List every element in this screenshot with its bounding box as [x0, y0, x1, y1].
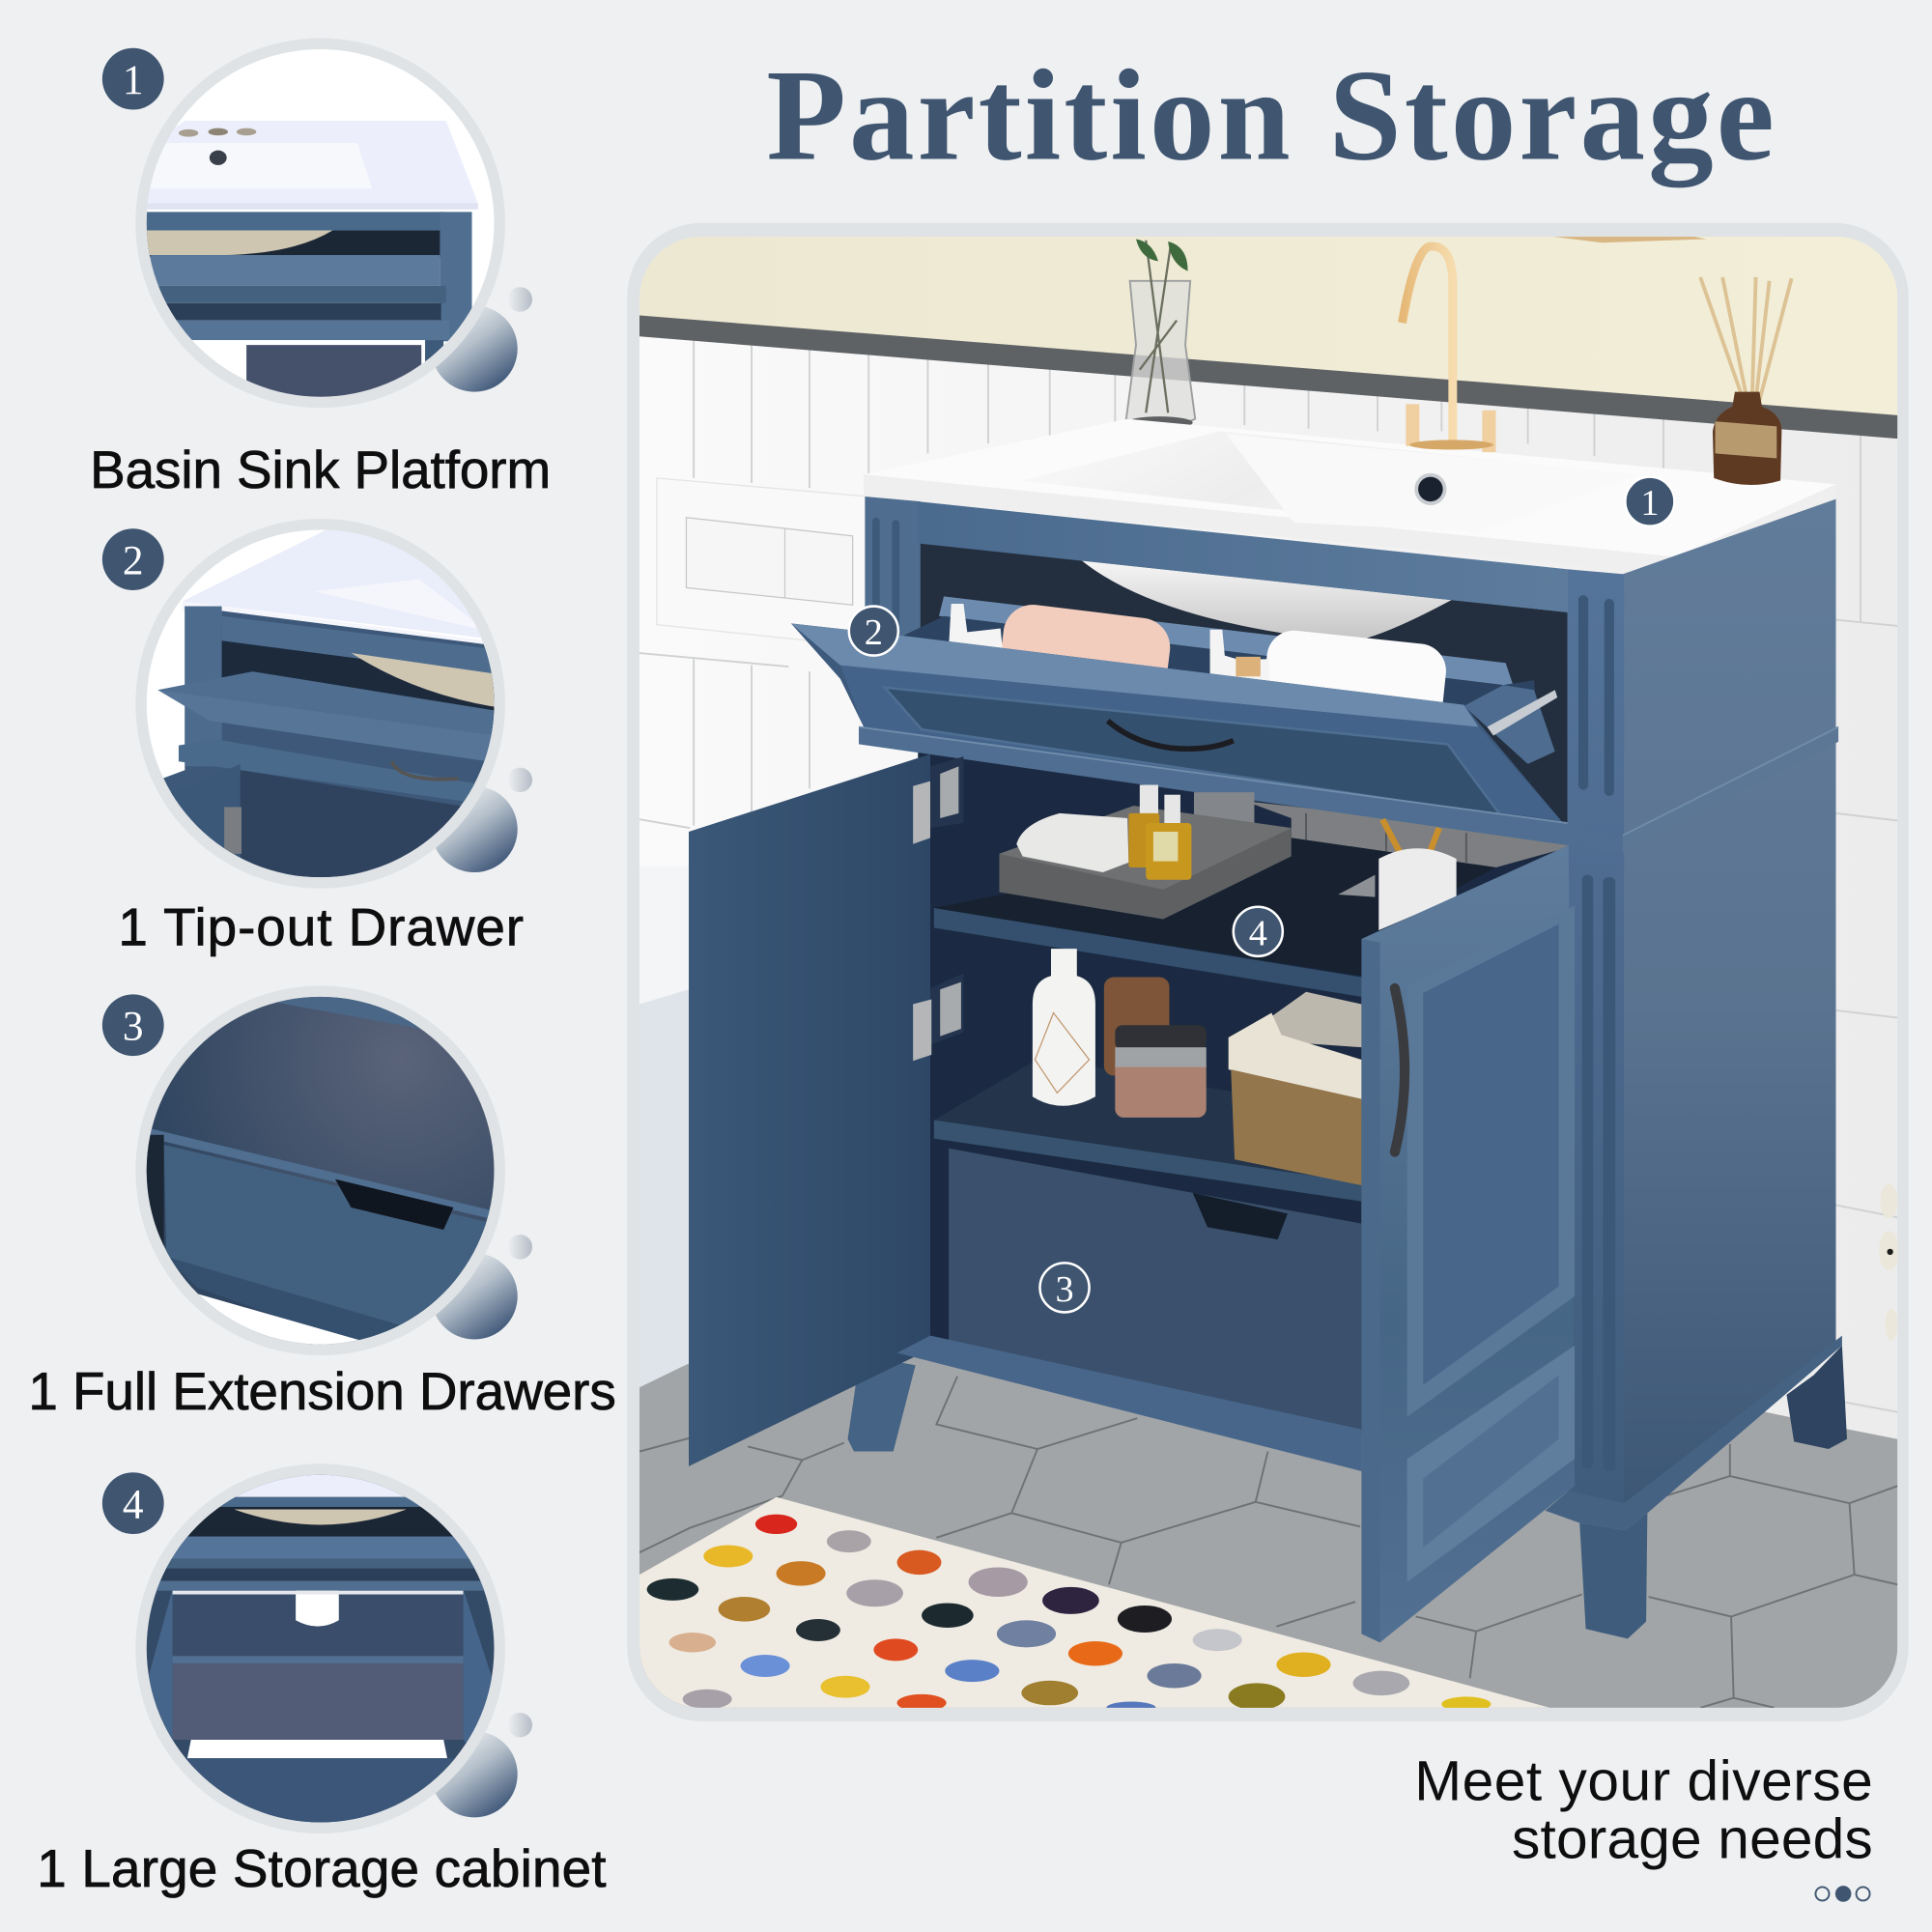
mid moulding — [859, 727, 1838, 853]
wall tiles — [639, 330, 1897, 1454]
top rail — [918, 501, 1567, 612]
drawer front — [791, 623, 1564, 842]
marker 2: 2 — [865, 612, 883, 653]
panel frame — [627, 223, 1909, 1721]
tagline: storage needs — [1512, 1807, 1873, 1870]
white bottle — [1209, 630, 1446, 702]
item 4: large storage cabinet — [37, 1463, 607, 1898]
slide rail — [1488, 690, 1557, 735]
scene artwork — [639, 237, 1899, 1714]
right back leg — [1786, 1346, 1847, 1449]
lower panel — [1407, 1346, 1575, 1582]
label: 1 Full Extension Drawers — [28, 1361, 616, 1421]
number badge: 2 — [123, 537, 144, 583]
front left leg — [848, 1355, 916, 1452]
wall trim band — [639, 316, 1897, 439]
upper shelf with items — [933, 784, 1495, 997]
marker 3: 3 — [1055, 1269, 1074, 1310]
marker 4: 4 — [1249, 913, 1267, 953]
marker 4 — [1234, 907, 1283, 956]
left door — [689, 754, 963, 1466]
brown cup — [1104, 977, 1169, 1076]
decorative bubbles — [431, 1713, 532, 1817]
drain — [1414, 473, 1446, 505]
marker 3 — [1040, 1263, 1090, 1312]
marker 1 — [1625, 477, 1674, 526]
full extension drawer — [949, 1149, 1361, 1432]
raised panel — [885, 688, 1501, 815]
tagline: Meet your diverse — [1414, 1750, 1873, 1813]
marker 1: 1 — [1640, 483, 1659, 524]
lower shelf items — [934, 949, 1361, 1202]
towels in basket — [1271, 992, 1361, 1047]
upper dark cavity — [1466, 601, 1567, 822]
top lip — [791, 623, 1479, 727]
detail circle — [135, 518, 505, 889]
front right pilaster — [1567, 569, 1624, 1506]
tip-out drawer — [791, 596, 1564, 842]
number badge: 4 — [123, 1481, 144, 1527]
bottom rail — [897, 1336, 1361, 1471]
detail circle — [135, 1463, 505, 1836]
right door — [1361, 845, 1575, 1642]
item 3: full extension drawer — [28, 985, 616, 1421]
marker 2 — [849, 607, 898, 656]
drain hole glimpse — [1338, 875, 1375, 897]
label: 1 Tip-out Drawer — [118, 896, 524, 956]
interior back — [918, 542, 1567, 1435]
door handle — [1395, 988, 1405, 1152]
faucet — [1403, 246, 1495, 452]
towel — [1016, 813, 1128, 872]
number badge — [102, 1472, 164, 1534]
vase with stems — [1126, 239, 1195, 429]
tagline — [1414, 1750, 1873, 1870]
number badge — [102, 48, 164, 110]
number badge: 1 — [123, 57, 144, 103]
bevel — [840, 666, 1561, 820]
drawer side wing — [1463, 685, 1555, 764]
top left pilaster — [865, 497, 921, 638]
bathtub — [639, 867, 689, 1390]
pilaster grooves — [1578, 595, 1615, 1471]
tray — [999, 806, 1292, 920]
item 1: basin sink platform — [90, 37, 551, 499]
plant at right edge — [1879, 1184, 1899, 1341]
basket wicker — [1231, 1069, 1361, 1185]
cabinet right side panel — [1623, 499, 1836, 1513]
detail circle — [135, 985, 505, 1355]
drawer interior — [904, 616, 1536, 705]
title: Partition Storage — [766, 44, 1775, 188]
decorative bubbles — [431, 1235, 532, 1339]
back rim — [939, 596, 1513, 685]
tall glass — [1194, 792, 1254, 854]
wall plate — [657, 478, 868, 647]
under-counter bowl — [1082, 560, 1452, 642]
cup with pens — [1382, 819, 1439, 867]
decorative bubbles — [431, 287, 532, 392]
basin — [1106, 432, 1423, 510]
drawer notch — [1193, 1193, 1288, 1239]
basket liner — [1229, 1012, 1361, 1099]
item 2: tip-out drawer — [102, 518, 532, 956]
jar — [1115, 1057, 1207, 1118]
drawer handle — [1108, 721, 1234, 749]
reed diffuser — [1700, 277, 1792, 485]
diamond mark — [1035, 1012, 1090, 1093]
detail circle — [135, 37, 505, 408]
countertop — [864, 419, 1835, 556]
floor — [639, 1337, 1897, 1708]
tile seen through cabinet — [1244, 801, 1567, 867]
white bottle — [1033, 949, 1095, 1106]
number badge — [102, 994, 164, 1056]
mirror edge — [1552, 237, 1707, 242]
pink bottle — [949, 604, 1171, 668]
pager dots — [1815, 1886, 1870, 1902]
panel: main vanity scene — [627, 223, 1909, 1721]
label: 1 Large Storage cabinet — [37, 1838, 607, 1898]
number badge — [102, 528, 164, 590]
base plinth and front right leg — [1545, 1336, 1842, 1638]
rug — [639, 1497, 1550, 1714]
hinge upper — [913, 756, 963, 844]
wall upper beige — [639, 237, 1897, 415]
upper panel — [1407, 906, 1575, 1417]
number badge: 3 — [123, 1004, 144, 1050]
amber bottles — [1140, 784, 1158, 814]
decorative bubbles — [431, 768, 532, 872]
hinge lower — [913, 974, 963, 1061]
label: Basin Sink Platform — [90, 440, 551, 499]
